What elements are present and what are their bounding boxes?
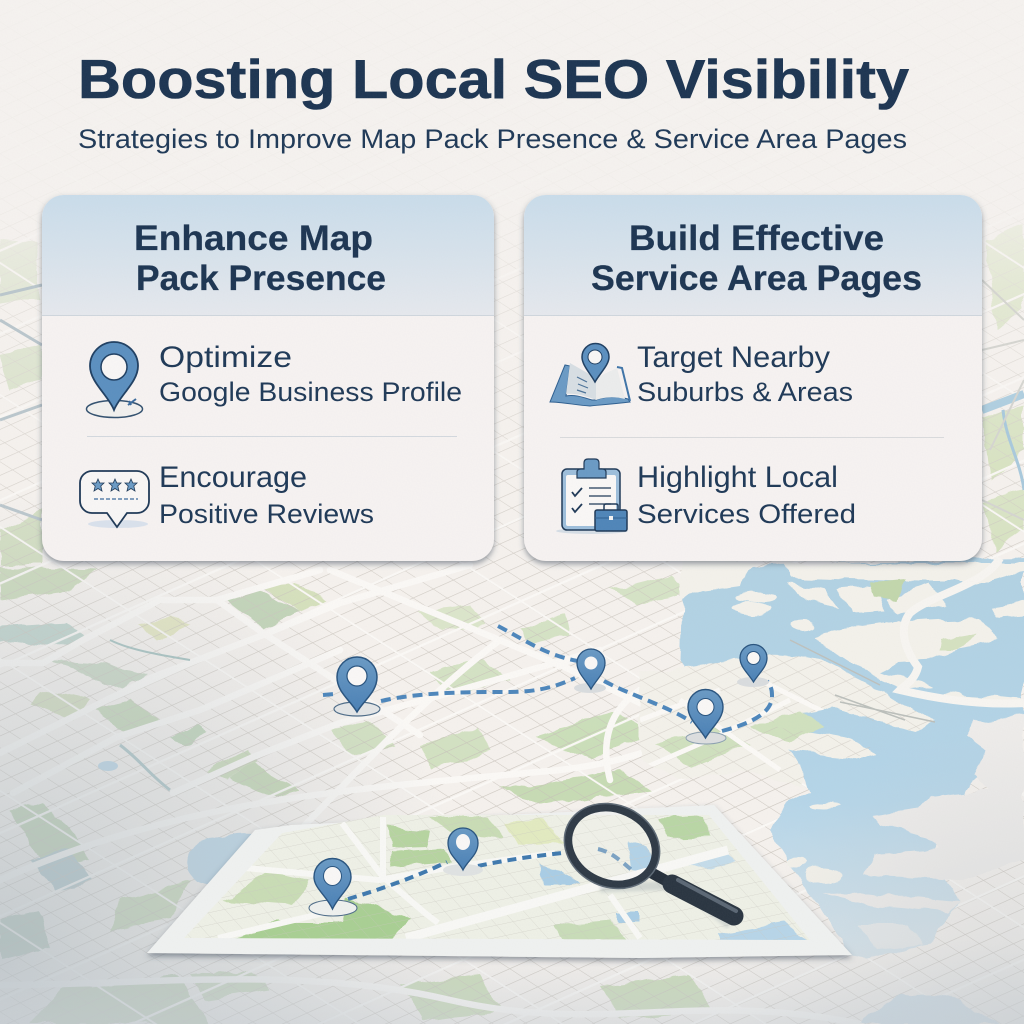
item: encourage positive reviews (159, 461, 374, 529)
map pin 2 (574, 649, 606, 693)
panel: build effective service area pages (524, 195, 982, 561)
map pin 4 (737, 644, 769, 687)
icon: location pin (86, 342, 142, 418)
map pin 1 (334, 657, 380, 716)
panel header (524, 195, 982, 316)
item: optimize google business profile: Google Business Profile (159, 377, 462, 407)
heading: Pack Presence (136, 259, 386, 298)
map pin 3 (686, 690, 726, 744)
land masses (640, 560, 1024, 950)
water (185, 558, 1024, 1024)
coastal road (900, 558, 1024, 704)
panel header (42, 195, 494, 316)
dashed route on city map (323, 626, 772, 731)
main roads (0, 565, 860, 1024)
icon: map book with pin (550, 344, 630, 406)
streets on peninsula (640, 650, 940, 790)
icon: review speech bubble (80, 471, 149, 528)
heading (591, 219, 922, 298)
heading (134, 219, 386, 298)
item: target nearby suburbs (637, 341, 853, 407)
panel: enhance map pack presence (42, 195, 494, 561)
folded paper map (146, 804, 853, 966)
background map (0, 214, 1024, 1024)
paper map pin left (309, 858, 357, 916)
icon: clipboard and briefcase (556, 459, 628, 534)
item: optimize google business profile (159, 341, 462, 407)
item: target nearby suburbs: Suburbs & Areas (637, 377, 853, 407)
heading: Service Area Pages (591, 259, 922, 298)
title: Boosting Local SEO Visibility (78, 48, 909, 110)
magnifying glass (550, 788, 736, 925)
heading: Build Effective (629, 219, 884, 258)
item: encourage positive reviews: Positive Reviews (159, 499, 374, 529)
dashed route on paper map (348, 849, 634, 899)
item: highlight local services: Highlight Local (637, 461, 838, 494)
subtitle: Strategies to Improve Map Pack Presence & Service Area Pages (78, 124, 907, 154)
side river details (0, 280, 1024, 520)
item: highlight local services (637, 461, 856, 529)
item: highlight local services: Services Offered (637, 499, 856, 529)
heading: Enhance Map (134, 219, 373, 258)
item: encourage positive reviews: Encourage (159, 461, 307, 494)
item: target nearby suburbs: Target Nearby (637, 341, 830, 374)
map sheet contents (184, 815, 810, 940)
item: optimize google business profile: Optimize (159, 341, 292, 374)
green parks (0, 225, 1024, 1024)
paper map pin right (443, 828, 483, 876)
